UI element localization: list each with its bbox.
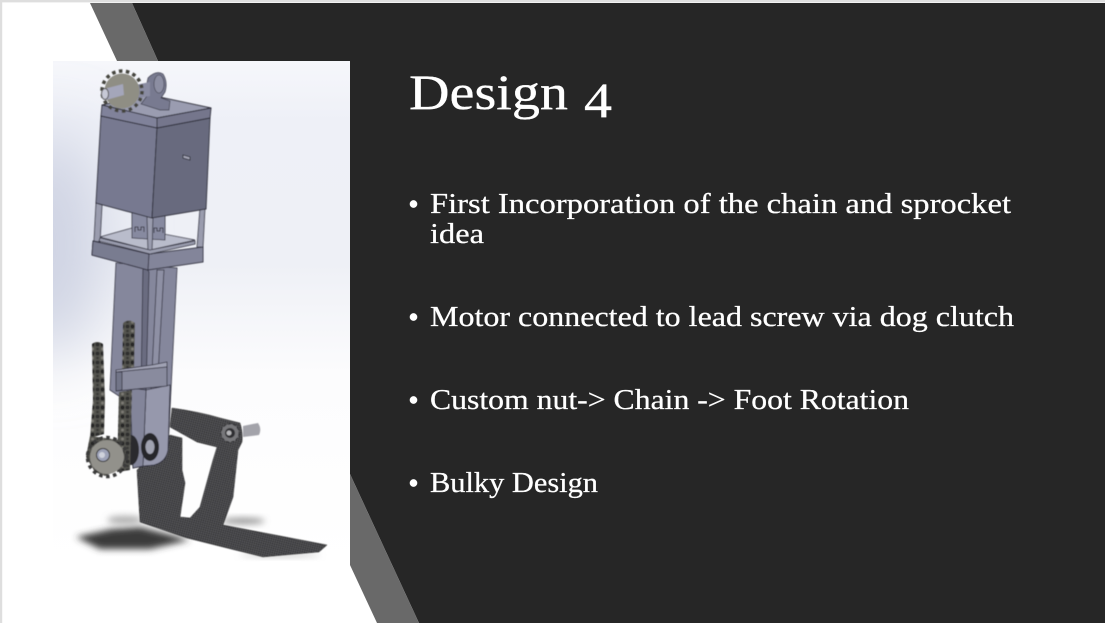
floor shadow <box>76 516 320 557</box>
bullet: custom nut: Custom nut-> Chain -> Foot Rotation <box>430 385 909 416</box>
chain strands <box>86 320 135 476</box>
bullet list <box>410 189 1014 499</box>
bullet: chain and sprocket: First Incorporation of the chain and sprocket <box>430 189 1011 220</box>
bearing block <box>141 73 170 110</box>
title <box>409 64 612 128</box>
top sprocket and shaft <box>102 71 150 111</box>
bullet: chain and sprocket <box>410 189 1011 250</box>
grey accent band: bottom <box>350 474 419 623</box>
nut block <box>116 362 167 391</box>
top plate <box>101 95 211 128</box>
title: 4 <box>584 72 612 128</box>
CAD render of prosthetic leg <box>53 61 350 560</box>
lower pulleys <box>123 433 159 465</box>
lower sprocket <box>88 438 126 476</box>
title: Design <box>409 64 568 120</box>
grey accent band: top <box>90 3 158 61</box>
lower frame plate <box>92 241 203 270</box>
main motor housing <box>96 116 210 218</box>
clutch column and window frame <box>94 203 205 254</box>
bullet: bulky design: Bulky Design <box>430 468 598 499</box>
leg shaft <box>110 262 177 468</box>
foot plate <box>137 408 327 557</box>
ankle pin <box>221 423 260 442</box>
bullet: motor: Motor connected to lead screw via dog clutch <box>430 302 1014 333</box>
bullet: chain and sprocket: idea <box>430 219 485 250</box>
